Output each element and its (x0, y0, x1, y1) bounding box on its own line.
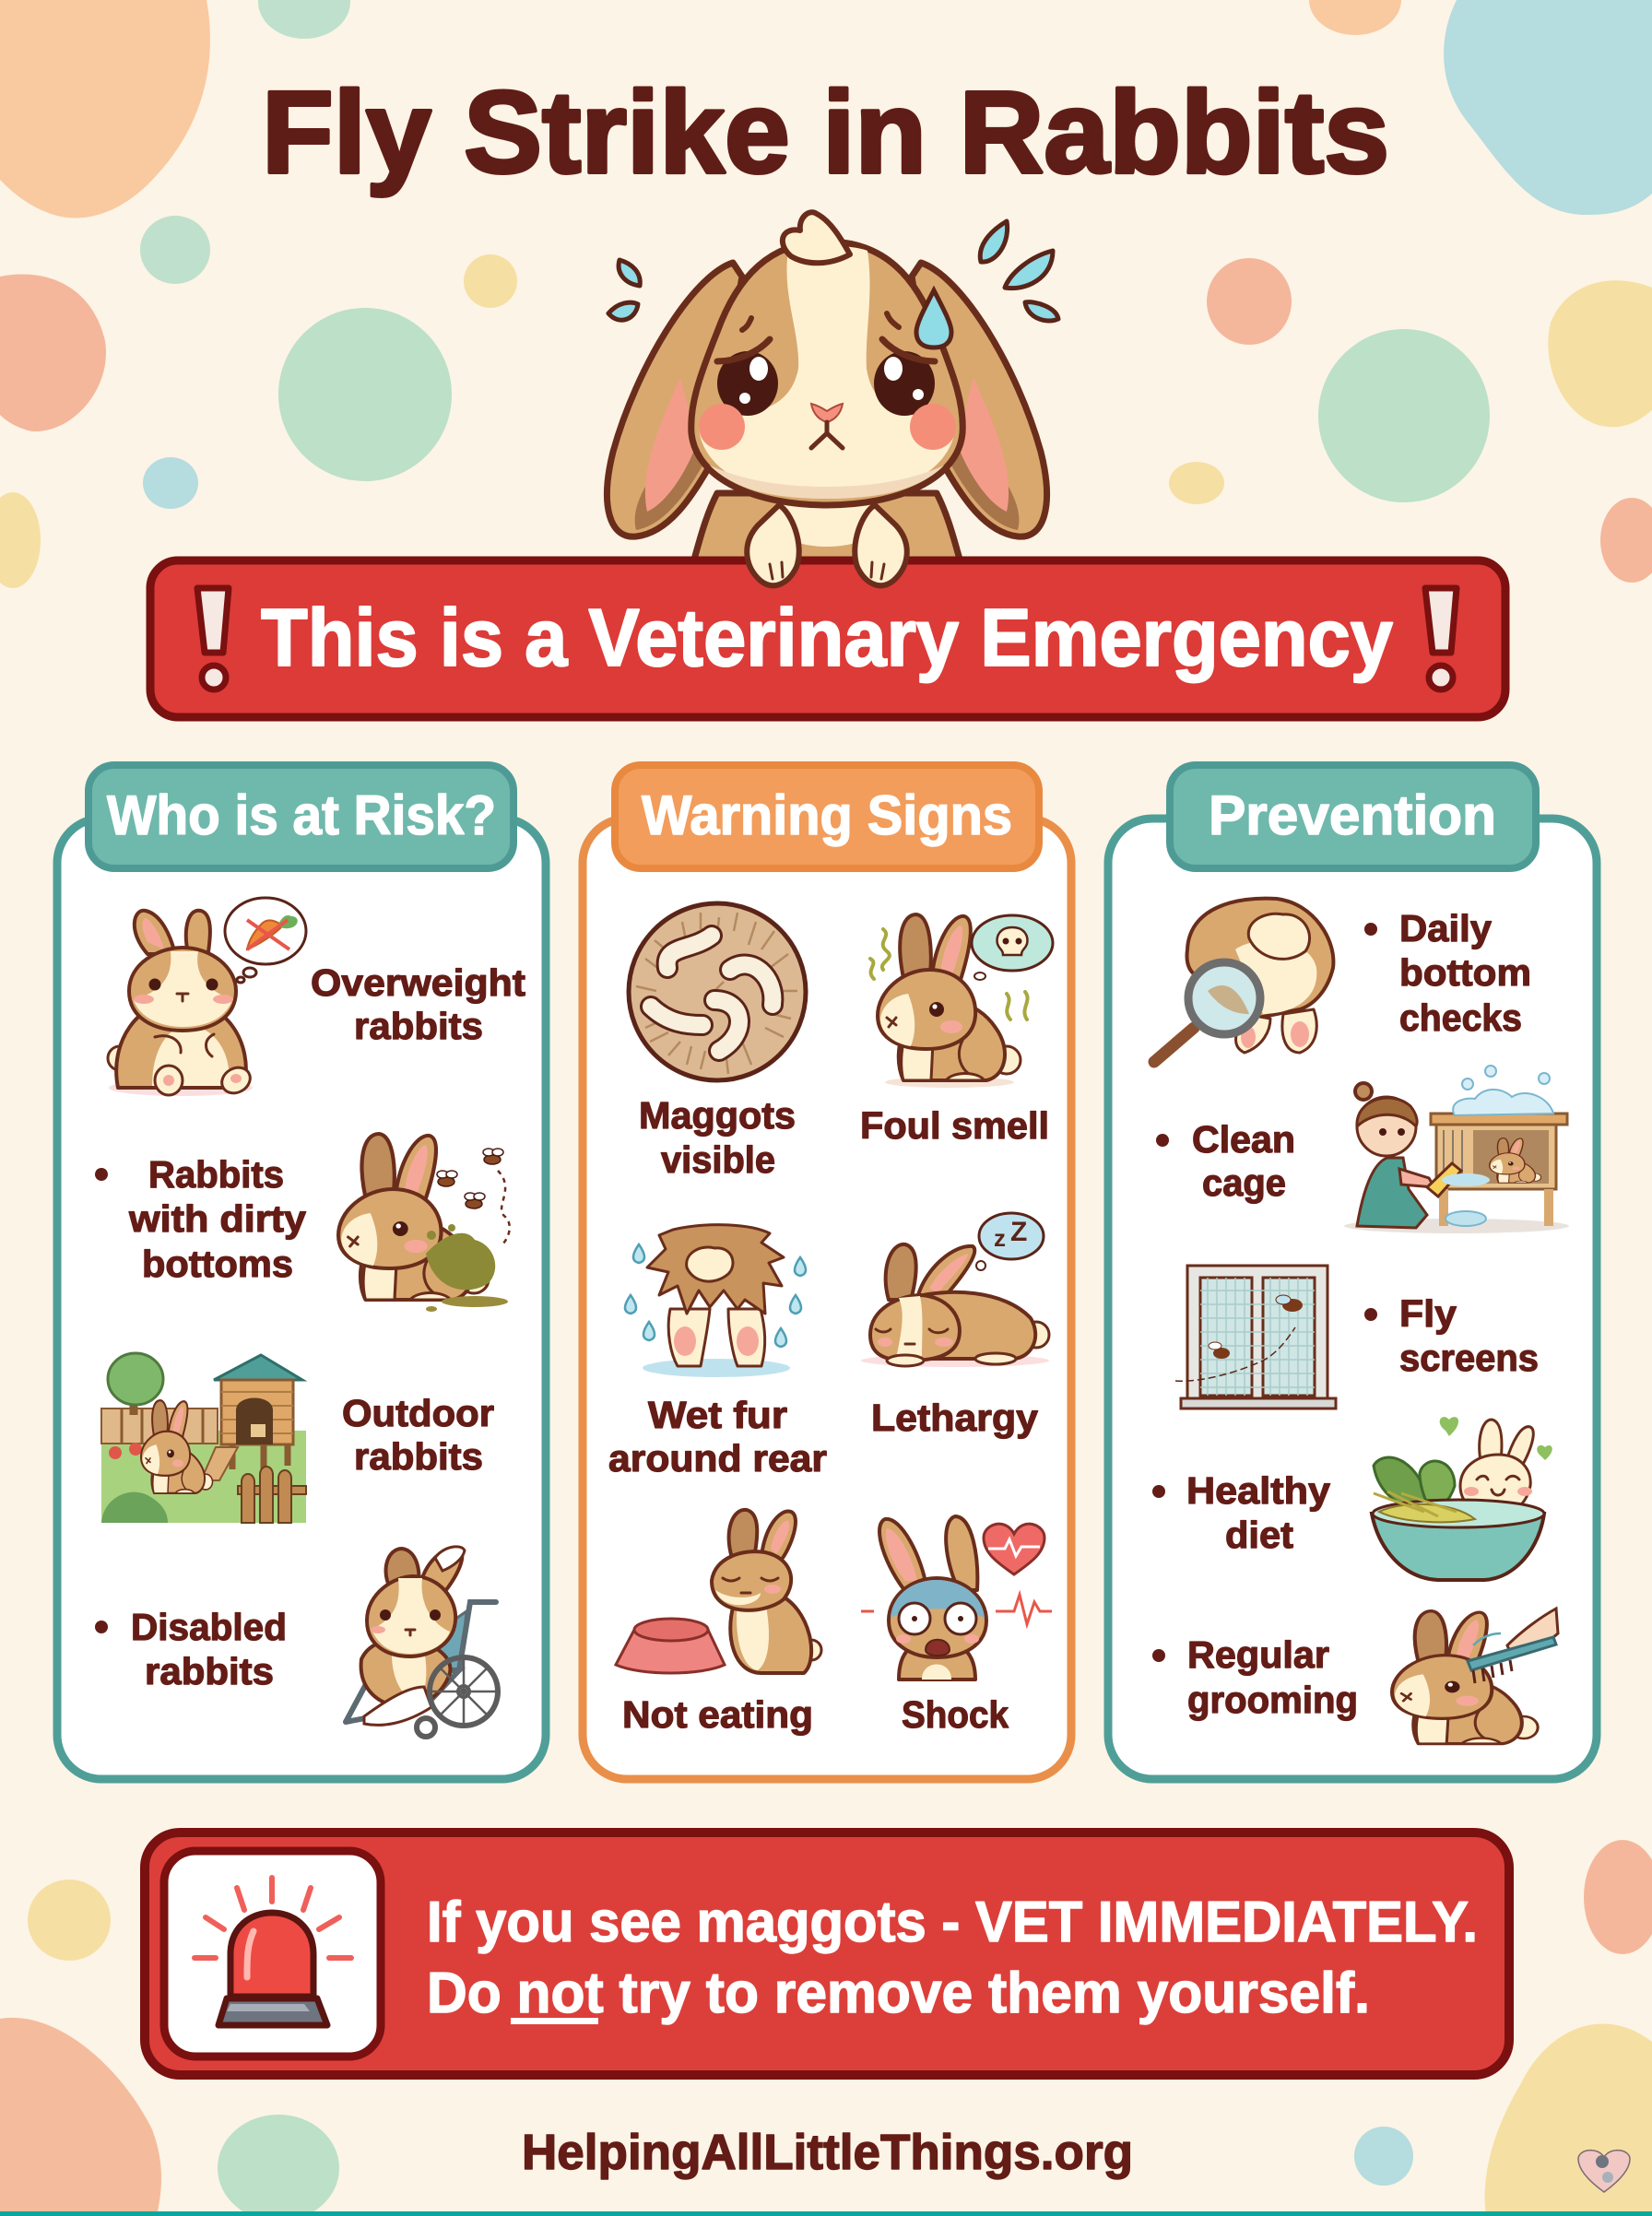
icon: heart with pulse (861, 1524, 1052, 1624)
icon: sleep bubble: Z (1010, 1217, 1027, 1247)
callout: vet immediately (145, 1833, 1509, 2075)
illustration: rabbit with hay and greens in bowl (1372, 1417, 1552, 1580)
label: rabbits with dirty bottoms: with dirty (128, 1197, 306, 1240)
icon: hutch (201, 1355, 302, 1480)
illustration: foul-smelling rabbit (870, 914, 1053, 1088)
illustration: rabbit in shock (861, 1516, 1052, 1680)
label: maggots visible: visible (661, 1138, 775, 1181)
label: outdoor rabbits: Outdoor (342, 1392, 494, 1434)
title: Fly Strike in Rabbits (262, 67, 1389, 197)
illustration: wet fur around rear (625, 1225, 806, 1377)
label: not eating: Not eating (622, 1693, 813, 1736)
label: healthy diet: Healthy (1186, 1469, 1330, 1512)
icon: green hearts (1440, 1417, 1552, 1460)
icon: red siren (164, 1851, 381, 2057)
icon: wheelchair wheels (417, 1657, 498, 1737)
icon: right exclamation mark (1425, 588, 1457, 690)
label: fly screens: screens (1399, 1337, 1539, 1379)
heading tab: prevention (1170, 765, 1536, 868)
icon: thought bubble with crossed-out carrot (225, 898, 306, 983)
label: fly screens (1364, 1292, 1539, 1379)
icon: foreground fence (238, 1467, 306, 1523)
label: wet fur around rear: around rear (608, 1437, 827, 1479)
icon: flowers (109, 1443, 142, 1459)
label: maggots visible (639, 1094, 796, 1181)
illustration: bandaged rabbit in wheelchair (346, 1547, 498, 1737)
illustration: worried rabbit mascot (607, 212, 1058, 562)
icon: skull thought bubble (972, 915, 1053, 980)
label: overweight rabbits: Overweight (311, 961, 525, 1004)
illustration: person cleaning rabbit hutch (1344, 1066, 1569, 1233)
callout text: Do not try to remove them yourself. (427, 1962, 1370, 2025)
label: clean cage: cage (1202, 1161, 1286, 1204)
heading tab: warning signs: Warning Signs (642, 784, 1012, 846)
icon: left exclamation mark (197, 588, 229, 690)
icon: flies (1209, 1295, 1303, 1359)
icon: sleep bubble (976, 1213, 1044, 1270)
label: rabbits with dirty bottoms: Rabbits (148, 1153, 284, 1196)
icon: sleep bubble: z (994, 1224, 1006, 1252)
callout text: If you see maggots - VET IMMEDIATELY. (427, 1891, 1478, 1954)
icon: empty food bowl (616, 1619, 725, 1673)
illustration: lethargic rabbit (861, 1213, 1049, 1367)
website footer: HelpingAllLittleThings.org (522, 2125, 1133, 2180)
label: rabbits with dirty bottoms (95, 1153, 306, 1285)
label: disabled rabbits: Disabled (131, 1606, 287, 1648)
label: daily bottom checks: Daily (1399, 907, 1492, 949)
heading tab: who is at risk: Who is at Risk? (107, 784, 496, 846)
label: clean cage: Clean (1192, 1118, 1295, 1161)
panel: warning signs (583, 765, 1071, 1779)
label: foul smell: Foul smell (860, 1104, 1049, 1147)
panel: prevention (1108, 765, 1597, 1779)
icon: water drops (625, 1244, 806, 1347)
label: lethargy: Lethargy (871, 1397, 1038, 1439)
heading tab: prevention: Prevention (1209, 784, 1496, 846)
label: regular grooming: grooming (1187, 1679, 1358, 1721)
label: daily bottom checks: checks (1399, 996, 1522, 1039)
illustration: outdoor rabbit garden scene (101, 1353, 306, 1523)
label: shock: Shock (902, 1693, 1009, 1736)
label: healthy diet (1152, 1469, 1330, 1556)
icon: magnifying glass (1154, 962, 1260, 1062)
label: fly screens: Fly (1399, 1292, 1457, 1335)
icon: small heart logo (1578, 2151, 1630, 2192)
label: daily bottom checks (1364, 907, 1531, 1039)
label: wet fur around rear (608, 1394, 827, 1479)
panel: who is at risk (57, 765, 546, 1779)
icon: flies (437, 1149, 503, 1208)
heading tab: warning signs (615, 765, 1039, 868)
label: daily bottom checks: bottom (1399, 951, 1531, 994)
icon: rabbit paws over banner (747, 505, 907, 585)
label: overweight rabbits (311, 961, 525, 1047)
label: disabled rabbits (95, 1606, 287, 1692)
illustration: rabbit with dirty bottom (338, 1134, 510, 1312)
icon: rabbit ears (607, 263, 1047, 536)
label: outdoor rabbits (342, 1392, 494, 1478)
illustration: maggots on fur (629, 903, 806, 1080)
bottom accent bar (0, 2211, 1652, 2216)
label: regular grooming (1152, 1633, 1358, 1721)
illustration: window with fly screens (1175, 1266, 1336, 1409)
icon: sweat droplets (608, 221, 1058, 321)
label: regular grooming: Regular (1187, 1633, 1329, 1676)
label: wet fur around rear: Wet fur (648, 1394, 787, 1436)
label: overweight rabbits: rabbits (354, 1005, 483, 1047)
callout text (427, 1891, 1478, 2025)
icon: rabbit head (691, 212, 962, 505)
label: maggots visible: Maggots (639, 1094, 796, 1137)
illustration: rabbit being brushed (1392, 1609, 1558, 1744)
label: healthy diet: diet (1225, 1514, 1293, 1556)
heading tab: who is at risk (88, 765, 513, 868)
icon: bowl (1372, 1491, 1544, 1580)
label: disabled rabbits: rabbits (145, 1650, 274, 1692)
banner text: This is a Veterinary Emergency (261, 592, 1393, 683)
label: outdoor rabbits: rabbits (354, 1435, 483, 1478)
illustration: rabbit ignoring food bowl (616, 1510, 821, 1673)
label: clean cage (1156, 1118, 1295, 1204)
label: rabbits with dirty bottoms: bottoms (142, 1243, 293, 1285)
icon: person scrubbing (1355, 1083, 1461, 1228)
illustration: rabbit rear under magnifying glass (1154, 899, 1333, 1062)
emergency banner (150, 560, 1505, 717)
illustration: overweight rabbit (108, 898, 306, 1098)
icon: hutch (1431, 1066, 1567, 1226)
icon: grooming brush and hand (1468, 1609, 1558, 1683)
